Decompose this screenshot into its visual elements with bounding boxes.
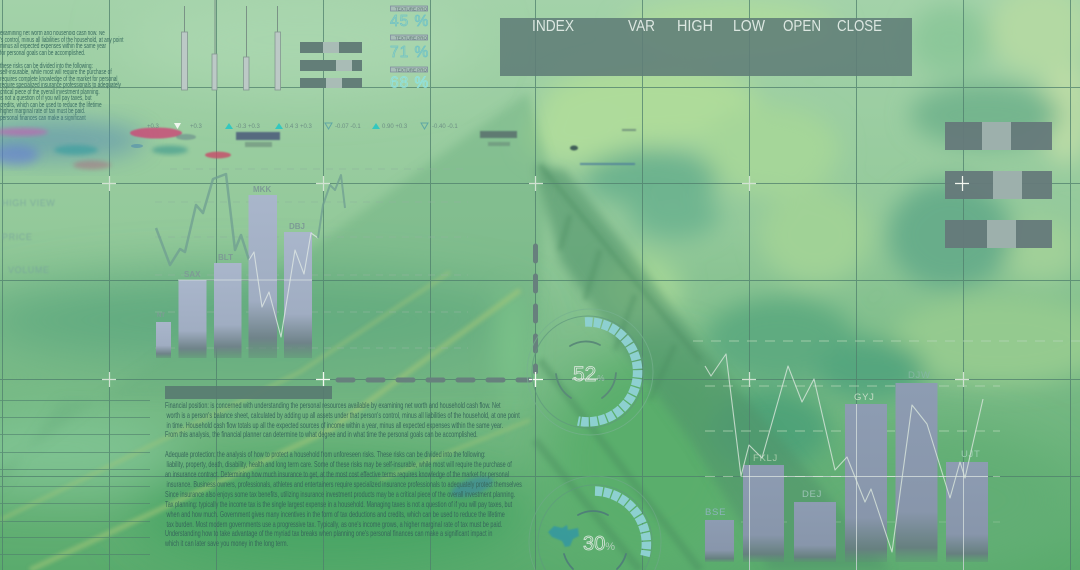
left axis labels xyxy=(2,198,55,275)
financial planning text block: Tax planning: typically the income tax is the single largest expense in a household. Managing taxes is not a question of if you will pay taxes, but xyxy=(165,499,512,509)
right bar chart xyxy=(705,370,988,570)
gauge: 52%: 52% xyxy=(573,363,604,386)
left clipped text fragment: for personal goals can be accomplished. xyxy=(0,50,85,56)
gauge: 30% xyxy=(529,476,661,570)
financial planning text block: when and how much. Government gives many incentives in the form of tax deductions and credits, which can be used to reduce the lifetime xyxy=(167,509,505,519)
building silhouette xyxy=(0,92,890,570)
percentage readouts: 71 % xyxy=(390,44,429,61)
left clipped text fragment: self-insurable, while most will require the purchase of xyxy=(0,69,112,76)
gauge: 52% xyxy=(527,309,653,435)
left bar chart: DBJ xyxy=(289,222,305,231)
right bar chart: FKLJ xyxy=(753,453,778,464)
left clipped text fragment xyxy=(0,31,124,121)
ticker row xyxy=(147,123,458,130)
right bar chart: GYJ xyxy=(854,392,875,403)
left line chart xyxy=(156,174,345,337)
financial planning text block: From this analysis, the financial planner can determine to what degree and in what time the personal goals can be accomplished. xyxy=(165,429,478,439)
ticker row: -0.07 -0.1 xyxy=(335,124,361,130)
table header panel: VAR xyxy=(628,18,655,35)
financial planning text block: Adequate protection: the analysis of how to protect a household from unforeseen risks. These risks can be divided into the following: xyxy=(165,449,486,459)
table header panel xyxy=(500,18,912,76)
left clipped text fragment: critical piece of the overall investment planning. xyxy=(0,88,100,96)
percentage readouts: TEXTURE PRO xyxy=(395,36,428,40)
ticker row: +0.3 xyxy=(147,124,160,130)
financial planning text block: tax burden. Most modern governments use a progressive tax. Typically, as one's income grows, a higher marginal rate of tax must be paid. xyxy=(167,519,502,529)
ticker row: 0.4 3 +0.3 xyxy=(285,124,313,130)
financial planning text block: Understanding how to take advantage of the myriad tax breaks when planning one's personal finances can make a significant impact in xyxy=(165,528,492,538)
financial planning text block: insurance. Business owners, professionals, athletes and entertainers require specialized insurance professionals to adequately protect themselves. xyxy=(167,479,522,489)
left clipped text fragment: minus all expected expenses within the same year xyxy=(0,43,106,50)
financial planning text block xyxy=(165,401,522,548)
right dashed guides xyxy=(693,341,1080,522)
table header panel: INDEX xyxy=(532,18,574,35)
percentage readouts: TEXTURE PRO xyxy=(395,6,428,12)
percentage readouts xyxy=(390,6,429,92)
left clipped text fragment: requires complete knowledge of the market for personal xyxy=(0,76,117,82)
dashed crosshair lines xyxy=(338,246,536,380)
dark ticker bars xyxy=(236,129,636,165)
left clipped text fragment: higher marginal rate of tax must be paid. xyxy=(0,108,85,115)
small slider bars xyxy=(300,42,362,88)
ticker row: -0.40 -0.1 xyxy=(432,124,458,130)
left axis labels: HIGH VIEW xyxy=(2,198,55,208)
left dashed guides xyxy=(155,169,468,348)
right line chart xyxy=(705,354,983,552)
ticker row: +0.3 xyxy=(190,124,203,130)
left bar chart: SAX xyxy=(184,270,201,279)
right bar chart: DJW xyxy=(908,370,931,381)
right range bars xyxy=(945,122,1052,248)
financial planning text block: Since insurance also enjoys some tax benefits, utilizing insurance investment products may be a critical piece of the overall investment planning. xyxy=(165,489,515,499)
left bar chart: NT xyxy=(157,313,165,319)
percentage readouts: TEXTURE PRO xyxy=(395,68,428,72)
blue smudge over text xyxy=(449,473,495,501)
ticker row: -0.3 +0.3 xyxy=(236,124,261,130)
left axis labels: VOLUME xyxy=(8,265,50,275)
financial planning text block: worth is a person's balance sheet, calculated by adding up all assets under that person's control, minus all liabilities of the household, at one point xyxy=(167,410,520,420)
table header panel: OPEN xyxy=(783,18,821,35)
left axis labels: PRICE xyxy=(2,232,33,242)
ticker row: 0.90 +0.3 xyxy=(382,124,408,130)
table header panel: HIGH xyxy=(677,18,713,35)
right bar chart: UJT xyxy=(961,449,981,460)
candlestick chart xyxy=(182,0,280,90)
blurred colour blobs xyxy=(0,120,231,170)
percentage readouts: 45 % xyxy=(390,13,429,30)
right bar chart: DEJ xyxy=(802,489,822,500)
left clipped text fragment: credits, which can be used to reduce the lifetime xyxy=(0,102,102,108)
left clipped text fragment: these risks can be divided into the following: xyxy=(0,62,93,70)
financial planning text block: which it can later save you money in the long term. xyxy=(165,538,288,548)
financial planning text block: an insurance contract. Determining how much insurance to get, at the most cost effective terms requires knowledge of the market for personal xyxy=(165,469,509,479)
percentage readouts: 68 % xyxy=(390,74,429,92)
left bar chart xyxy=(156,185,312,358)
right bar chart: BSE xyxy=(705,507,726,518)
financial planning text block: in time. Household cash flow totals up all the expected sources of income within a year, minus all expected expenses within the same year. xyxy=(167,420,503,430)
left bar chart: MKK xyxy=(253,185,271,194)
left clipped text fragment: require specialized insurance professionals to adequately xyxy=(0,82,121,89)
left clipped text fragment: 's control, minus all liabilities of the household, at any point xyxy=(0,36,123,44)
left clipped text fragment: is not a question of if you will pay taxes, but xyxy=(0,95,92,102)
text panel heading bar xyxy=(165,386,332,399)
financial planning text block: liability, property, death, disability, health and long term care. Some of these risks may be self-insurable, while most will require the purchase of xyxy=(167,459,512,469)
table header panel: LOW xyxy=(733,18,766,35)
gauge: 30%: 30% xyxy=(583,533,615,555)
table header panel: CLOSE xyxy=(837,18,882,35)
left bar chart: BLT xyxy=(218,253,233,262)
